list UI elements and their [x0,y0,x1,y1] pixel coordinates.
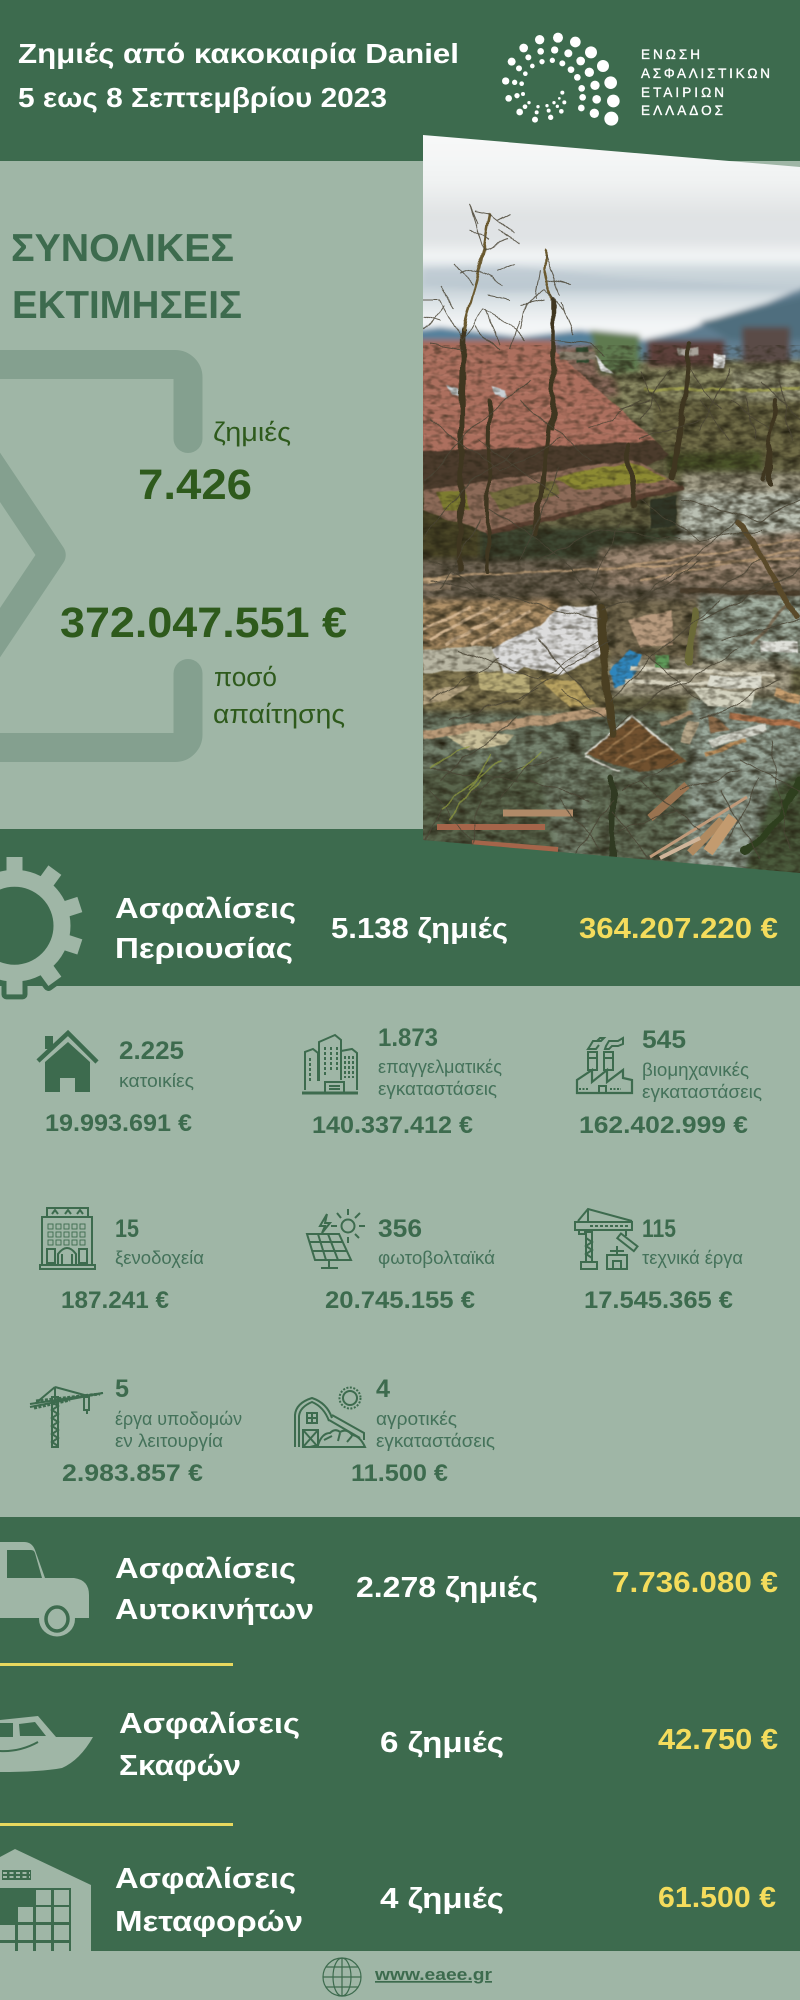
label [115,1409,242,1451]
panel: total estimates [0,227,347,748]
count: 1.873 [378,1024,438,1052]
count: 15 [115,1215,139,1243]
heading: Ασφαλίσεις [115,893,296,925]
label: εν λειτουργία [115,1431,223,1451]
skylight [447,385,462,397]
row: marine insurance [0,1708,778,1782]
logo: dot spiral [502,33,620,126]
icon: house [38,1033,97,1092]
item: agricultural [295,1375,495,1487]
label: ξενοδοχεία [115,1248,204,1268]
decorative bracket and chevron [0,364,188,748]
count: 545 [642,1026,686,1054]
trees [420,205,800,860]
heading: ΕΚΤΙΜΗΣΕΙΣ [12,284,242,327]
photo texture [423,360,800,875]
icon: solar panel and sun [307,1209,365,1268]
icon: tower crane [30,1387,103,1447]
heading [115,1863,303,1938]
label: φωτοβολταϊκά [378,1248,495,1268]
claim amount label: ποσό [214,662,277,692]
heading: ΣΥΝΟΛΙΚΕΣ [11,227,234,270]
heading [115,1553,314,1626]
label: κατοικίες [119,1071,194,1091]
icon: hotel [40,1208,95,1269]
amount: 140.337.412 € [312,1112,473,1139]
item: hotels [40,1208,204,1314]
count: 2.225 [119,1037,184,1065]
claims: 2.278 ζημιές [356,1572,538,1604]
heading: Περιουσίας [115,933,293,965]
count: 5 [115,1375,129,1403]
label [376,1409,495,1451]
icon: warehouse [0,1849,91,1951]
label [642,1060,762,1102]
amount: 42.750 € [658,1724,778,1756]
amount: 17.545.365 € [584,1287,733,1314]
icon: crane and building [575,1209,638,1269]
amount: 187.241 € [61,1287,169,1314]
count: 115 [642,1215,676,1243]
floating logs [423,712,607,735]
blue tarp [610,650,642,688]
item: commercial premises [302,1024,502,1139]
sky cloud streak [425,266,612,281]
row: motor insurance [0,1542,778,1636]
claim amount label [213,662,345,729]
label: αγροτικές [376,1409,457,1429]
icon: office towers [302,1035,358,1093]
heading: Ασφαλίσεις [115,1553,296,1585]
claims: 5.138 ζημιές [331,913,508,945]
bottom band [0,1517,800,1951]
icon: factory [577,1038,632,1093]
heading: Ασφαλίσεις [115,1863,296,1895]
amount: 7.736.080 € [612,1567,778,1599]
claims: 4 ζημιές [380,1883,504,1915]
count: 4 [376,1375,390,1403]
row: transport insurance [0,1849,776,1951]
label: εγκαταστάσεις [378,1079,497,1099]
logo text: ΕΤΑΙΡΙΩΝ [641,85,724,100]
fine photo grain [423,345,800,875]
logo text: ΕΛΛΑΔΟΣ [641,103,723,118]
item: industrial premises [577,1026,762,1139]
item: technical works [575,1209,743,1314]
band text: property insurance [0,857,778,994]
claim amount: 372.047.551 € [60,599,347,647]
amount: 364.207.220 € [579,913,778,945]
item: infrastructure [30,1375,242,1487]
icon: barn and sun [295,1388,365,1447]
icon: globe [323,1958,361,1996]
heading: Αυτοκινήτων [115,1594,314,1626]
icon: car [0,1542,89,1636]
label: εγκαταστάσεις [642,1082,762,1102]
photo: flooded houses and debris [415,125,800,880]
heading [115,893,296,965]
title: Ζημιές από κακοκαιρία Daniel [18,38,459,69]
amount: 19.993.691 € [45,1110,192,1137]
label [378,1057,502,1099]
item: homes [38,1033,194,1137]
count: 356 [378,1215,422,1243]
heading: Μεταφορών [115,1906,303,1938]
bare branches [420,205,800,860]
amount: 2.983.857 € [62,1460,203,1487]
logo text: ΑΣΦΑΛΙΣΤΙΚΩΝ [641,66,770,81]
claims number: 7.426 [138,461,252,509]
amount: 162.402.999 € [579,1112,748,1139]
heading [11,227,242,327]
planks on water [437,785,747,858]
icon: boat [0,1716,93,1772]
website: www.eaee.gr [374,1965,492,1984]
logo text: ΕΝΩΣΗ [641,47,700,62]
icon: gear [0,857,82,994]
date subtitle: 5 εως 8 Σεπτεμβρίου 2023 [18,82,387,113]
label: εγκαταστάσεις [376,1431,495,1451]
claim amount label: απαίτησης [213,699,345,729]
house detail [677,347,699,355]
claims label: ζημιές [213,417,291,447]
header band [0,0,800,161]
logo text [641,47,770,118]
label: βιομηχανικές [642,1060,749,1080]
wood frame [585,718,687,772]
debris stripes [423,607,530,645]
label: επαγγελματικές [378,1057,502,1077]
heading: Σκαφών [119,1750,241,1782]
footer [323,1958,492,1996]
heading: Ασφαλίσεις [119,1708,300,1740]
amount: 61.500 € [658,1882,776,1914]
amount: 20.745.155 € [325,1287,475,1314]
tan wood [627,610,673,648]
label: έργα υποδομών [115,1409,242,1429]
amount: 11.500 € [351,1460,448,1487]
label: τεχνικά έργα [642,1248,743,1268]
white bag [493,605,600,680]
item: solar [307,1209,495,1314]
claims: 6 ζημιές [380,1727,504,1759]
boards [625,668,775,685]
shed roof [423,460,683,533]
band: property insurance [0,829,800,986]
main roof [423,345,655,452]
heading [119,1708,300,1782]
